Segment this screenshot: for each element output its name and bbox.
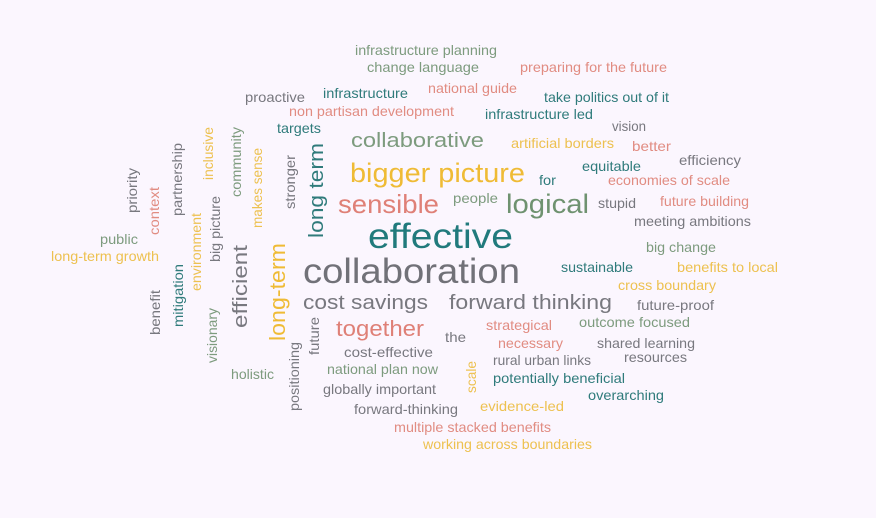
word: big change: big change <box>646 239 716 255</box>
word: multiple stacked benefits: multiple stacked benefits <box>394 419 551 435</box>
word: evidence-led: evidence-led <box>480 398 564 414</box>
word: shared learning: shared learning <box>597 335 695 351</box>
word: national plan now: national plan now <box>327 361 439 377</box>
word: infrastructure: infrastructure <box>323 85 408 101</box>
word: priority: priority <box>124 168 140 213</box>
word: globally important: globally important <box>323 381 436 397</box>
word: long-term growth: long-term growth <box>51 248 159 264</box>
word cloud <box>51 42 778 452</box>
word: vision: vision <box>612 118 646 134</box>
word: cost-effective: cost-effective <box>344 344 433 360</box>
word: cross boundary: cross boundary <box>618 277 716 293</box>
word: forward-thinking: forward-thinking <box>354 401 458 417</box>
word: forward thinking: forward thinking <box>449 292 612 314</box>
word: resources: resources <box>624 349 687 365</box>
word: efficiency: efficiency <box>679 152 741 168</box>
word: strategical: strategical <box>486 317 552 333</box>
word: benefits to local: benefits to local <box>677 259 778 275</box>
word: artificial borders: artificial borders <box>511 135 614 151</box>
word: big picture: big picture <box>207 196 223 262</box>
word: equitable: equitable <box>582 158 641 174</box>
word: potentially beneficial: potentially beneficial <box>493 370 625 386</box>
word: logical: logical <box>506 189 589 219</box>
word: change language: change language <box>367 59 479 75</box>
word: future: future <box>306 317 322 355</box>
word: better: better <box>632 138 671 154</box>
word: sensible: sensible <box>338 189 439 219</box>
word: overarching: overarching <box>588 387 664 403</box>
word: partnership: partnership <box>169 143 185 216</box>
word: for: for <box>539 172 556 188</box>
word: people: people <box>453 190 498 206</box>
word: future-proof: future-proof <box>637 297 714 313</box>
word: stronger: stronger <box>282 155 298 209</box>
word: sustainable: sustainable <box>561 259 633 275</box>
word: outcome focused: outcome focused <box>579 314 690 330</box>
word: cost savings: cost savings <box>303 292 428 314</box>
word: stupid: stupid <box>598 195 636 211</box>
word: community: community <box>228 127 244 197</box>
word: benefit: benefit <box>147 290 163 335</box>
word: holistic: holistic <box>231 366 274 382</box>
word: future building: future building <box>660 193 749 209</box>
word: infrastructure planning: infrastructure planning <box>355 42 497 58</box>
word: long term: long term <box>306 143 328 238</box>
word: the: the <box>445 329 466 345</box>
word: long-term: long-term <box>265 243 290 341</box>
word: together: together <box>336 316 424 341</box>
word: take politics out of it: take politics out of it <box>544 89 669 105</box>
word: collaboration: collaboration <box>303 252 520 291</box>
word: economies of scale: economies of scale <box>608 172 730 188</box>
word: mitigation: mitigation <box>170 264 186 327</box>
word: rural urban links: rural urban links <box>493 352 591 368</box>
word: inclusive: inclusive <box>200 127 216 180</box>
word: working across boundaries: working across boundaries <box>422 436 592 452</box>
word: infrastructure led: infrastructure led <box>485 106 593 122</box>
word: national guide: national guide <box>428 80 517 96</box>
word: context: context <box>146 187 162 235</box>
word: makes sense: makes sense <box>249 148 265 228</box>
word: necessary: necessary <box>498 335 563 351</box>
word: bigger picture: bigger picture <box>350 158 525 188</box>
word: proactive: proactive <box>245 89 305 105</box>
word: targets: targets <box>277 120 321 136</box>
word: efficient: efficient <box>230 244 252 328</box>
word: public: public <box>100 231 138 247</box>
word: preparing for the future: preparing for the future <box>520 59 667 75</box>
word: positioning: positioning <box>286 342 302 411</box>
word: scale: scale <box>463 361 479 393</box>
word: non partisan development: non partisan development <box>289 103 454 119</box>
word: effective: effective <box>368 217 513 256</box>
word: meeting ambitions: meeting ambitions <box>634 213 751 229</box>
word: collaborative: collaborative <box>351 130 484 152</box>
word: visionary: visionary <box>204 308 220 363</box>
word: environment: environment <box>188 213 204 291</box>
